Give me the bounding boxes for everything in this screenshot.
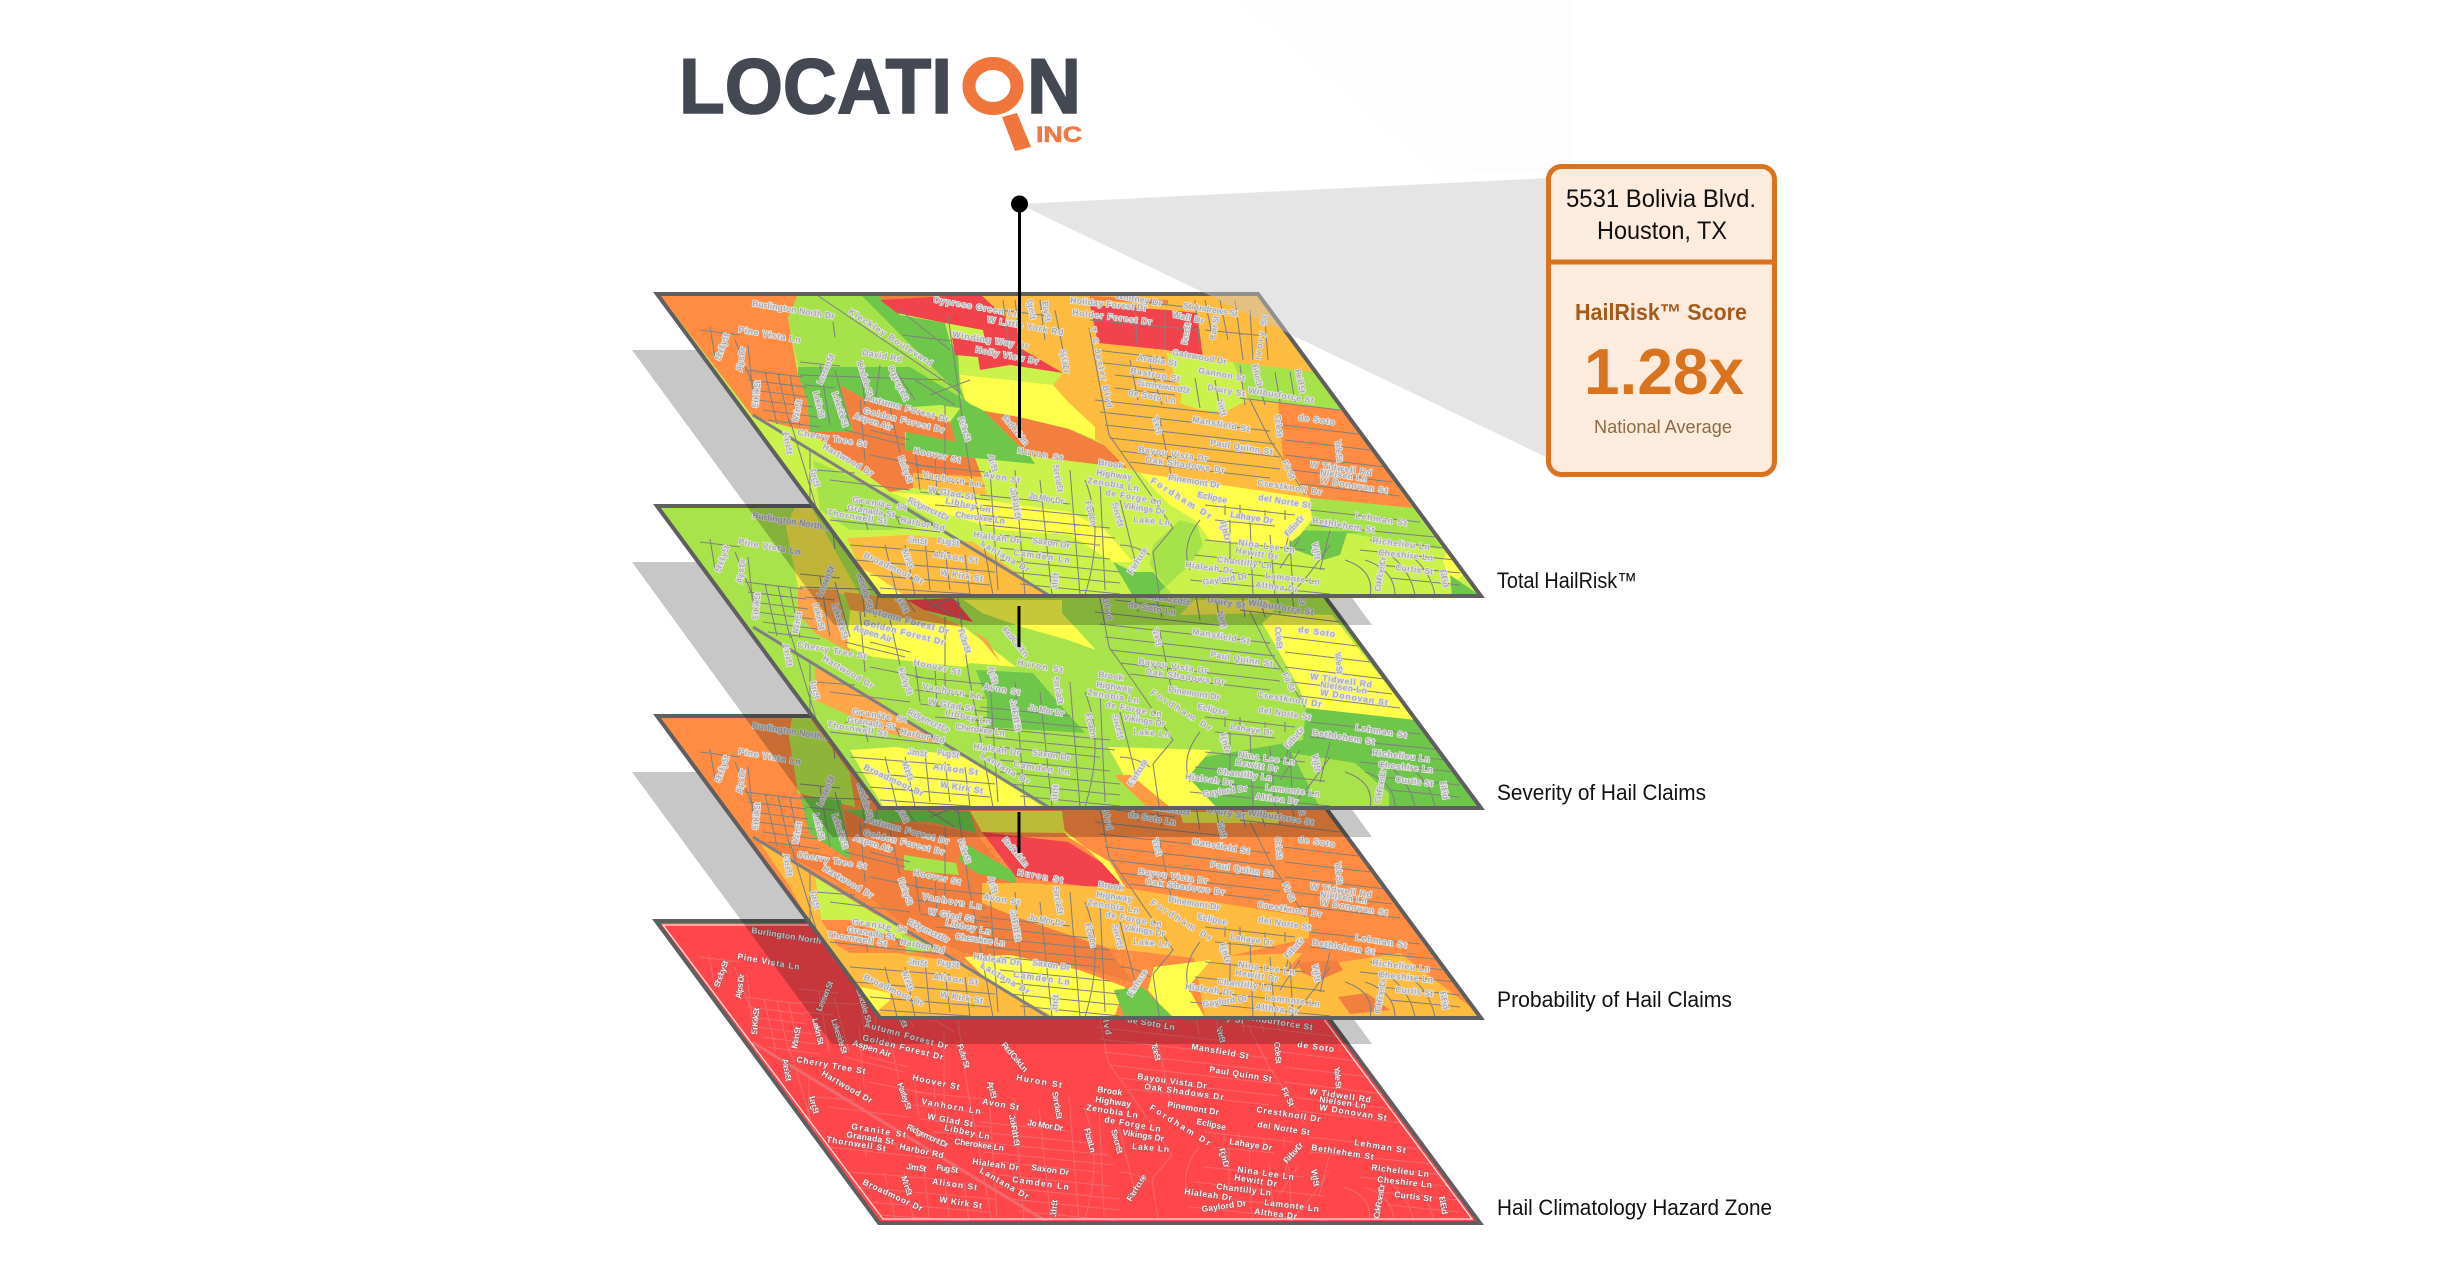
score callout box [1548, 166, 1775, 474]
street labels: Lamonte Ln [1265, 570, 1321, 587]
street labels: Hewitt Dr [1235, 545, 1279, 562]
street labels: Main St [900, 548, 916, 570]
total risk roads [700, 295, 1460, 600]
street labels: T C Jester Blvd [1088, 326, 1115, 409]
street labels: Vikings Dr [1123, 500, 1166, 517]
street labels: de Soto Ln [1128, 387, 1177, 405]
street labels: Shelby St [712, 332, 732, 362]
faint background wedge [1240, 0, 1570, 175]
street labels: Fuller St [956, 416, 973, 443]
probability risk zones [657, 716, 1486, 1019]
street labels: Avon St [983, 469, 1021, 485]
pin line segment through probability layer [1018, 812, 1020, 853]
street labels: Pug St [937, 535, 960, 548]
street labels: April St [986, 453, 1000, 473]
street labels: Highway [1096, 467, 1133, 482]
street labels: de Soto [1298, 412, 1336, 427]
street labels: David Rd [862, 347, 903, 364]
street labels: Sylvia Dr [1058, 349, 1072, 375]
street labels: Rittenhouse [1125, 545, 1150, 576]
street labels: Bastrop St [1130, 365, 1181, 384]
street labels: del Norte St [1258, 492, 1312, 510]
street labels: Cypress St [1025, 299, 1038, 320]
callout cone from pin to score box [1019, 178, 1550, 459]
street labels: Bayou Vista Dr [1138, 444, 1209, 464]
street labels: Holly View Dr [975, 344, 1040, 366]
logo: Location Inc: INC [1036, 122, 1082, 147]
street labels: W Little York Rd [987, 314, 1064, 337]
street labels: Lake Ln [1133, 514, 1171, 527]
street labels: Bay St [1040, 301, 1053, 322]
probability roads [700, 748, 1460, 1016]
layer caption: Climatology: Hail Climatology Hazard Zone [1497, 1195, 1772, 1220]
probability layer frame [657, 716, 1481, 1018]
street labels: W Glad St [928, 484, 975, 502]
street labels: Coppergate St [886, 364, 911, 402]
probability street labels [712, 712, 1451, 1016]
hazard layer frame [656, 921, 1480, 1223]
street labels: Rainbow Dr [1282, 513, 1307, 538]
street labels: Holder Forest Dr [1072, 307, 1153, 327]
street labels: Yale St [1333, 439, 1345, 462]
street labels: W Tidwell Rd [1310, 459, 1373, 478]
street labels on hazard layer [711, 917, 1450, 1221]
street labels: Gatewood Dr [1172, 347, 1228, 367]
street labels: Fordham Dr [1149, 475, 1214, 521]
street labels: de Forge Ln [1105, 487, 1163, 507]
street labels: Zenobia Ln [1087, 475, 1140, 493]
street labels: Cypress Green Ln [933, 294, 1020, 319]
pale roads on hazard layer [699, 954, 1459, 1221]
street labels: Lantana Dr [979, 538, 1032, 575]
street labels: Gannon St [1198, 365, 1246, 383]
street labels: Tate St [1150, 415, 1164, 435]
street labels: Granite St [852, 494, 908, 513]
map layer: Total HailRisk [657, 290, 1481, 600]
street labels: Gaylord Dr [1202, 571, 1249, 587]
street labels: Mansfield St [1192, 414, 1251, 434]
street labels: Sandra St [1051, 464, 1066, 493]
infographic canvas [632, 57, 1777, 1225]
street labels: Curtis St [1395, 562, 1434, 577]
score heading: HailRisk™ Score [1575, 299, 1747, 325]
street labels: Wilburforce St [1248, 385, 1315, 405]
address: Houston, TX [1597, 217, 1727, 245]
street labels: Bethlehem St [1312, 515, 1376, 535]
street labels: Arabia St [1137, 352, 1178, 368]
street labels: Saxon St [1110, 501, 1126, 528]
street labels: Eclipse [1197, 489, 1228, 505]
street labels: Carr St [1207, 315, 1221, 340]
street labels: Burlington North Dr [752, 298, 836, 321]
street labels: Jack Rabbit St [1008, 487, 1023, 520]
street labels: Winding Way Dr [952, 329, 1030, 351]
street labels: Richelieu Ln [1372, 535, 1431, 552]
street labels: Pinemont Dr [1168, 472, 1221, 490]
street labels: Bethune St [1250, 363, 1265, 387]
street labels: Reid St [1293, 368, 1308, 394]
street labels: Oak Shadows Dr [1145, 454, 1226, 475]
street labels: Granada St [847, 502, 896, 520]
street labels: Alison St [933, 549, 979, 565]
street labels: Golden Forest Dr [863, 405, 946, 435]
pin stem through total risk layer [1018, 204, 1021, 438]
street labels: Crestknoll Dr [1257, 477, 1323, 497]
street labels: Aspen Air [852, 410, 894, 432]
street labels: Whitney Dr [1115, 290, 1163, 308]
street labels: St Andrews St [1183, 300, 1239, 319]
street labels: Nielsen Ln [1320, 467, 1368, 484]
shadow of probability layer [632, 772, 1372, 1044]
street labels: Cole St [1273, 414, 1285, 437]
street labels: Hoover St [913, 445, 962, 465]
hazard layer inner line [663, 925, 1472, 1219]
address [1566, 185, 1756, 245]
layer caption: Probability: Probability of Hail Claims [1497, 987, 1732, 1012]
street labels: Sir Kirk St [750, 380, 762, 408]
pin line segment through severity layer [1018, 606, 1020, 647]
street labels: Wall Dr [1172, 309, 1206, 326]
street labels: Cherry Tree St [797, 427, 867, 449]
severity roads [700, 535, 1460, 806]
street labels: Paul Quinn St [1210, 437, 1274, 457]
logo: Location Inc: LOCATI [679, 42, 952, 130]
layer caption: Total HailRisk: Total HailRisk™ [1497, 568, 1637, 593]
street labels: Artesia St [781, 431, 795, 455]
street labels: Alps Dr [734, 345, 748, 372]
street labels: Main St [790, 399, 804, 422]
street labels: Red Oak Ln [1000, 413, 1031, 447]
street labels: Oak Forest Dr [1372, 555, 1388, 592]
street labels: Nina Lee Ln [1238, 537, 1296, 555]
score value: 1.28x [1584, 335, 1744, 408]
street labels: Pilgrim Dr [1218, 520, 1233, 543]
street labels: Pine Vista Ln [738, 324, 801, 345]
street labels: Jo Mor Dr [1028, 490, 1066, 506]
street labels: Ivory St [1252, 314, 1270, 360]
street labels: Hialeah Dr [973, 529, 1021, 546]
logo: Location Inc [679, 42, 1082, 151]
street labels: Saxon Dr [1032, 535, 1071, 550]
street labels: Hialeah Dr [1185, 559, 1234, 576]
street labels: Wright St [1310, 542, 1323, 560]
street labels: W Donovan St [1320, 475, 1389, 496]
street labels: John St [1049, 572, 1060, 590]
severity layer frame [657, 506, 1481, 808]
street labels [712, 290, 1451, 594]
street labels: Ella Blvd [1438, 569, 1451, 588]
street labels: W Kirk St [940, 567, 984, 584]
street labels: Lassen St [815, 352, 836, 386]
street labels: Huron St [1017, 445, 1064, 463]
street labels: Vanhorn Ln [922, 469, 982, 489]
severity risk zones [657, 505, 1485, 809]
street labels: Flora Ln [1083, 500, 1099, 527]
street labels: Holiday Forest Dr [1070, 295, 1148, 313]
street labels: Drury St [1207, 382, 1246, 399]
street labels: Broadmoor Dr [862, 550, 926, 587]
street labels: Chantilly Ln [1217, 554, 1273, 571]
street labels: Fir St [1280, 459, 1298, 481]
street labels: Hartley St [896, 454, 915, 484]
total risk zones [657, 294, 1481, 596]
street labels: Camden Ln [1013, 547, 1071, 565]
layer caption: Severity: Severity of Hail Claims [1497, 780, 1706, 805]
street labels: Lahaye Dr [1230, 509, 1274, 526]
map layer: Severity of Hail Claims [657, 502, 1485, 812]
street labels: Lakin St [811, 390, 827, 419]
address: 5531 Bolivia Blvd. [1566, 185, 1756, 213]
street labels: Libbey Ln [945, 495, 992, 515]
score caption: National Average [1594, 417, 1732, 437]
shadow of total risk layer [632, 350, 1372, 625]
street labels: Ross St [1179, 322, 1193, 345]
street labels: Jim St [907, 534, 928, 547]
logo: Location Inc: N [1027, 42, 1081, 130]
street labels: Cheshire Ln [1378, 547, 1434, 563]
street labels: Althea Dr [1255, 579, 1299, 594]
street labels: Harbor Rd [900, 514, 946, 533]
street labels: Thornwell St [827, 507, 888, 526]
street labels: Yates St [1215, 398, 1229, 417]
map layer: Probability of Hail Claims [657, 712, 1486, 1022]
map layer: Hail Climatology Hazard Zone [656, 917, 1480, 1227]
street labels: Autumn Forest Dr [864, 392, 951, 424]
street labels: Lang St [808, 468, 822, 488]
pin head [1011, 196, 1028, 212]
street labels: Lakeside St [830, 391, 851, 428]
street labels: Cherokee Ln [955, 509, 1006, 526]
shadow of severity layer [632, 562, 1372, 837]
street labels: Ridgemont Dr [906, 495, 952, 523]
street labels: Summerwood St [1137, 377, 1191, 395]
street labels: Hartwood Dr [821, 441, 876, 479]
street labels: Brook [1098, 457, 1124, 470]
red hazard surface [656, 921, 1480, 1223]
severity street labels [712, 502, 1451, 806]
street labels: Lindale St [855, 360, 875, 397]
total risk layer frame [657, 294, 1481, 596]
icon: magnifying glass forming the letter O [969, 64, 1031, 151]
street labels: Kleckley Boulevard [847, 306, 935, 368]
street labels: Lehman St [1355, 510, 1408, 528]
